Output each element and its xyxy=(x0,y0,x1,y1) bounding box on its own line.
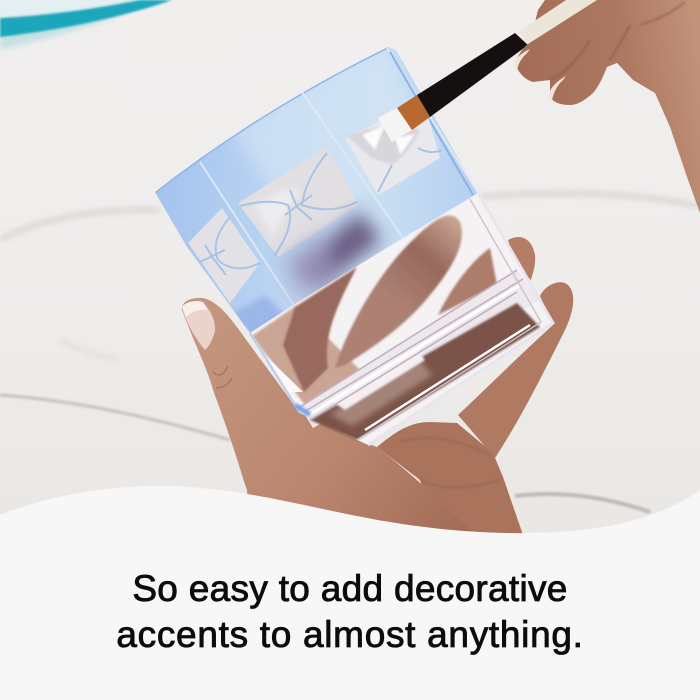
stencil window: centre xyxy=(238,147,358,257)
photo: hands painting a glass on a marble counter xyxy=(0,0,700,534)
brush handle xyxy=(518,0,597,44)
icon: paint brush xyxy=(378,33,528,142)
icon: holding hand xyxy=(182,237,573,535)
icon: painting hand xyxy=(513,0,700,213)
caption text: So easy to add decorative xyxy=(132,568,568,609)
white wave panel xyxy=(0,486,700,700)
stencil window: right xyxy=(345,105,440,195)
stencil window: left xyxy=(188,208,260,303)
caption text xyxy=(116,568,584,655)
purple fade xyxy=(280,212,382,305)
thumb nail xyxy=(182,301,215,350)
glass tumbler body xyxy=(250,192,553,445)
blue painted band on the glass xyxy=(155,47,478,340)
caption text: accents to almost anything. xyxy=(116,614,584,655)
